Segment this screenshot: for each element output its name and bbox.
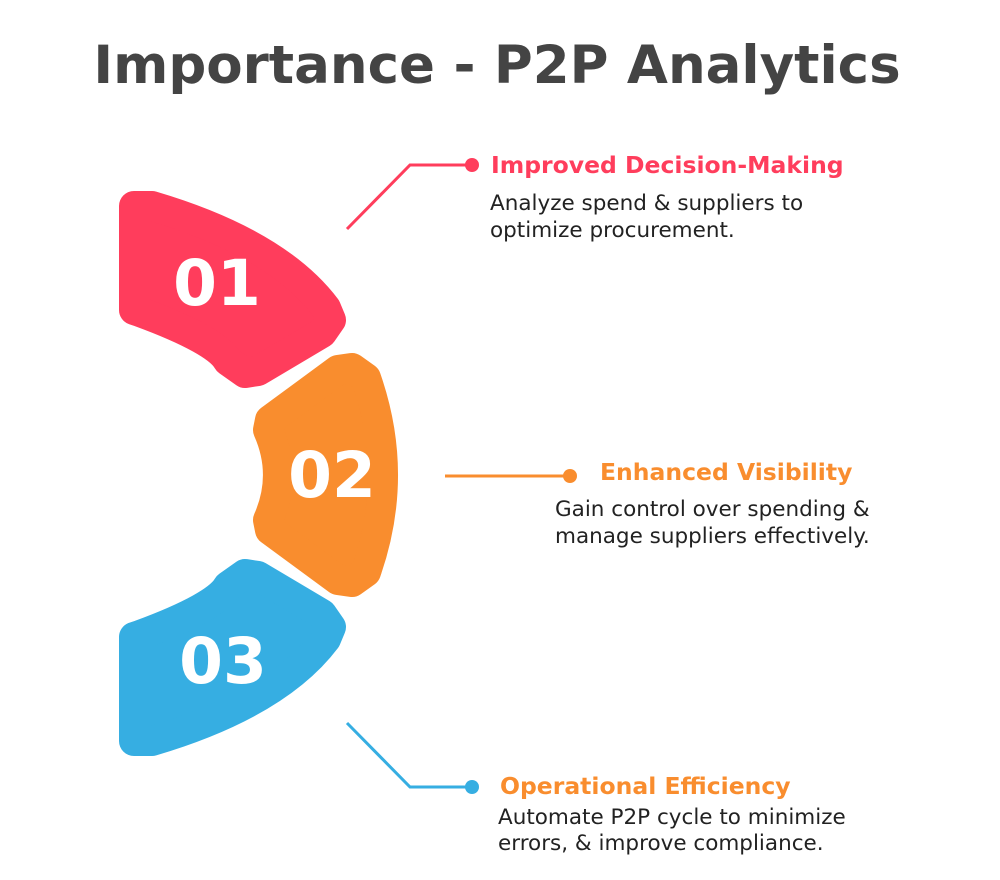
item 02 text: manage suppliers effectively.: [555, 524, 870, 549]
item 03 text: errors, & improve compliance.: [498, 831, 824, 856]
connector 01: [347, 158, 479, 229]
item 02 text: Enhanced Visibility: [600, 458, 852, 486]
item 03 text: Operational Efficiency: [500, 772, 791, 800]
segment 02: [268, 368, 383, 582]
item 01 text: [490, 151, 844, 243]
segment 01: 01: [173, 247, 261, 320]
title: Importance - P2P Analytics: [93, 35, 901, 96]
item 01 text: optimize procurement.: [490, 218, 735, 243]
segment 03: [134, 574, 331, 741]
item 02 text: [555, 458, 870, 549]
segment 02: 02: [288, 439, 376, 512]
connector 03: [347, 723, 479, 794]
item 01 text: Analyze spend & suppliers to: [490, 191, 803, 216]
item 02 text: Gain control over spending &: [555, 497, 870, 522]
item 03 text: Automate P2P cycle to minimize: [498, 805, 846, 830]
segment 03: 03: [179, 625, 267, 698]
item 01 text: Improved Decision-Making: [491, 151, 844, 179]
connector 02: [445, 469, 577, 483]
item 03 text: [498, 772, 846, 856]
segment 01: [134, 206, 331, 373]
